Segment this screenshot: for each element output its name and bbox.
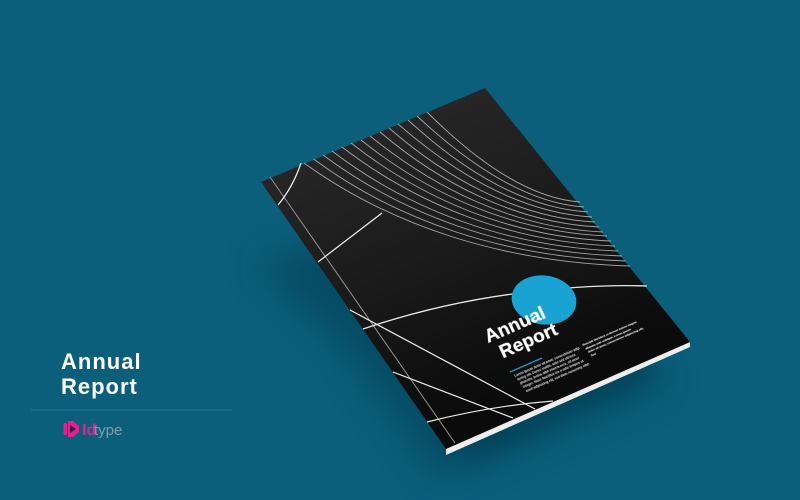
heading: Annual Report: Annual: [61, 349, 142, 374]
background shadow of the report: [255, 240, 670, 480]
grey curved line group: [304, 112, 630, 266]
logo: Idtype: type: [94, 422, 122, 439]
cover body text left: Lorem ipsum dolor sit amet, consectetuer adip: [514, 346, 580, 378]
cover body text left: integer. Nunc faucibus leo a odio tempus ut: [522, 359, 585, 389]
report cover: [261, 88, 690, 449]
cover body text left: amet adipiscing elit, sed diam nonummy nibh: [525, 362, 590, 393]
report mockup: [261, 88, 690, 455]
heading: Annual Report: Report: [61, 374, 138, 399]
report page edge: [446, 342, 690, 455]
cover title: Annual: [481, 303, 549, 348]
logo wordmark: Id: [82, 422, 96, 439]
cover body text left: pharetra, lectus nibh viverra arcu, sit amet: [519, 356, 581, 385]
cover title: [481, 301, 562, 366]
cover body text right: aliquam erat volutpat. Lorem ipsum: [585, 327, 632, 350]
cover body text right: Sed: [590, 352, 597, 358]
cover body text left: iscing elit. Donec mattis, ante sed ultrices: [517, 353, 577, 382]
cover body text left: [514, 345, 590, 394]
cover title: Report: [496, 319, 562, 363]
teal accent line: [510, 358, 542, 372]
cover line art: [270, 163, 647, 443]
logo: Idtype: [64, 421, 122, 439]
cover body text right: [582, 318, 646, 359]
cover body text right: Suscipit tincidunt ut laoreet dolore magna: [582, 320, 638, 347]
logo icon: [64, 421, 79, 437]
blue circle: [508, 271, 580, 329]
heading: Annual Report: [61, 349, 142, 399]
cover body text right: dolor sit amet, consectetuer adipiscing elit,: [587, 326, 644, 354]
divider: [31, 409, 232, 411]
